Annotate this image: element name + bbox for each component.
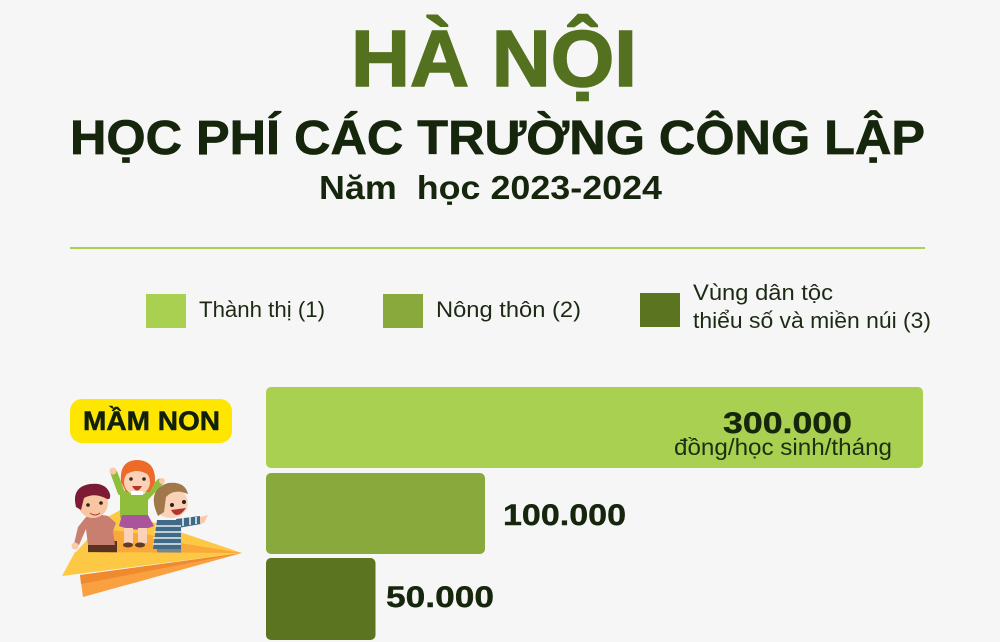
legend item: ethnic and mountain areas xyxy=(640,280,931,333)
plane back fold xyxy=(75,510,242,553)
label: preschool: MẦM NON xyxy=(83,405,220,436)
school year: Năm học 2023-2024 xyxy=(319,169,663,206)
bar: rural 100.000: 100.000 xyxy=(503,499,626,532)
title: HÀ NỘI xyxy=(351,14,637,103)
illustration: children on paper plane xyxy=(62,460,242,597)
bar: rural 100.000 xyxy=(266,473,626,554)
legend item: rural: Nông thôn (2) xyxy=(436,297,581,322)
label: preschool xyxy=(70,399,232,443)
bar: mountain 50.000: 50.000 xyxy=(386,581,494,614)
legend xyxy=(146,280,931,333)
child: girl xyxy=(110,460,165,548)
bar: urban 300.000: đồng/học sinh/tháng xyxy=(674,434,892,460)
bar chart xyxy=(266,387,923,640)
legend item: rural xyxy=(383,294,581,328)
child: left boy xyxy=(72,484,117,553)
bar: urban 300.000: 300.000 xyxy=(723,407,852,440)
legend item: urban: Thành thị (1) xyxy=(199,297,325,322)
legend item: ethnic and mountain areas: Vùng dân tộc xyxy=(693,280,833,305)
legend item: ethnic and mountain areas: thiểu số và miền núi (3) xyxy=(693,308,931,333)
plane front wing xyxy=(62,552,242,576)
bar: mountain 50.000 xyxy=(266,558,494,640)
legend item: urban xyxy=(146,294,325,328)
subtitle: HỌC PHÍ CÁC TRƯỜNG CÔNG LẬP xyxy=(70,110,925,165)
bar: urban 300.000 xyxy=(266,387,923,468)
child: right boy xyxy=(153,483,208,553)
